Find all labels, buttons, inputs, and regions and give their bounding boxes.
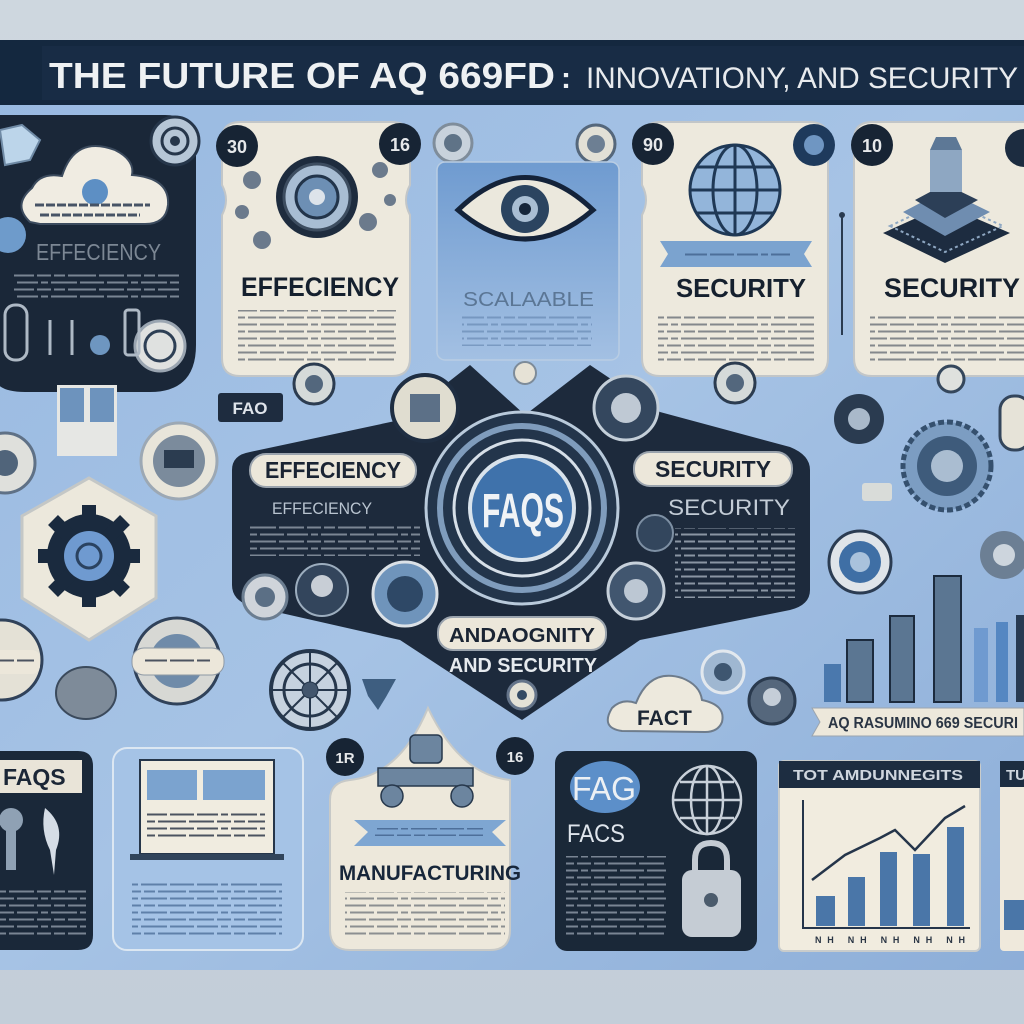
bars	[816, 827, 964, 926]
axis labels: NH NH NH NH NH	[815, 935, 965, 945]
icon: small ring 2	[577, 125, 615, 163]
panel: central FAQ hub	[232, 365, 810, 720]
text block	[870, 313, 1024, 363]
icon: edge machine	[980, 531, 1024, 579]
badge: 90	[632, 123, 674, 165]
heading: security: SECURITY	[668, 495, 790, 520]
icon: browser	[130, 760, 284, 860]
heading: SECURITY	[676, 273, 806, 303]
chart: skyline bars	[824, 576, 1024, 702]
line series	[812, 806, 965, 880]
icon: blue coin	[829, 531, 891, 593]
pill: efficiency	[250, 454, 416, 487]
badge: 16	[496, 737, 534, 775]
badge: 1R	[326, 738, 364, 776]
pill: anonymity: ANDAOGNITY	[449, 625, 596, 647]
panel: scalable	[437, 162, 619, 360]
icon: server boxes	[57, 385, 117, 456]
icon: tools	[5, 305, 139, 360]
panel: manufacturing	[330, 708, 521, 950]
heading: EFFECIENCY	[241, 272, 399, 302]
heading: FACS: FACS	[567, 820, 625, 848]
panel: efficiency card	[222, 122, 410, 376]
panel: bottom left FAQs	[0, 751, 93, 950]
pin	[514, 362, 536, 384]
icon: network globe	[903, 422, 991, 510]
icon: left bottom badge	[0, 620, 42, 700]
text blocks	[250, 522, 420, 556]
icon: pill badge	[132, 618, 224, 704]
icon: small ring	[434, 124, 472, 162]
icon: wheel	[271, 651, 349, 729]
heading: and security: AND SECURITY	[449, 655, 598, 677]
text block	[14, 272, 179, 300]
panel: edge card	[1000, 761, 1024, 951]
badge: 16: 16	[507, 749, 523, 766]
icon: machine	[378, 735, 473, 807]
badge: 30: 30	[227, 137, 247, 157]
panel: line chart	[779, 761, 980, 951]
vertical connector	[839, 212, 845, 335]
icon: edge badge	[1000, 396, 1024, 450]
chart header: TOT AMDUNNEGITS	[793, 767, 963, 784]
text block	[566, 856, 666, 938]
icons row	[243, 375, 673, 626]
panel: browser glass	[113, 748, 303, 950]
panel: FAQ dark	[555, 751, 757, 951]
banner: chart label	[812, 708, 1024, 736]
icon: small badge	[508, 681, 536, 709]
badge: 10	[851, 124, 893, 166]
heading: FAG	[570, 761, 640, 813]
icon: cloud	[21, 146, 168, 224]
icon: cloud FACT	[608, 676, 723, 732]
pill: security: SECURITY	[655, 456, 771, 482]
badge: 16: 16	[390, 135, 410, 155]
icon: padlock	[682, 843, 741, 937]
heading: MANUFACTURING	[339, 862, 521, 885]
icon: gem	[362, 679, 396, 710]
panel: security card 2	[854, 122, 1024, 376]
badge: ring	[793, 124, 835, 166]
panel: efficiency dark left	[0, 115, 196, 392]
text block	[462, 316, 592, 346]
icon: chip stack	[883, 137, 1010, 263]
heading: SECURITY	[884, 273, 1020, 303]
icon: badge	[135, 321, 185, 371]
pill: security	[634, 452, 792, 486]
icon: blue dot left	[0, 217, 26, 253]
text block	[238, 310, 396, 362]
small icons	[235, 162, 396, 249]
icon: ring small	[702, 651, 744, 693]
text block	[345, 892, 505, 938]
icon: cloud FACT: FACT	[637, 707, 692, 730]
icon: gear hexagon	[22, 478, 156, 640]
icon: lock glass top left	[0, 125, 40, 165]
icon: small box	[862, 483, 892, 501]
badge: 16	[379, 123, 421, 165]
right column icons	[834, 394, 884, 444]
icon: gear round	[749, 678, 795, 724]
badge: 10: 10	[862, 136, 882, 156]
heading: FAG: FAG	[572, 770, 636, 807]
badge: edge	[1005, 129, 1024, 167]
title banner: THE FUTURE OF AQ 669FD	[49, 55, 555, 96]
chart header	[779, 761, 980, 788]
icon: ring left edge	[0, 433, 35, 493]
icon: gear eye	[276, 156, 358, 238]
label: FAQ: FAO	[233, 399, 267, 418]
icon: eye	[458, 178, 593, 239]
text block	[658, 312, 814, 362]
badge: 30	[216, 125, 258, 167]
icon: ring	[715, 363, 755, 403]
label: FAQ	[218, 393, 283, 422]
panel: security card 1	[642, 122, 828, 376]
text block	[132, 880, 282, 936]
center label: FAQS	[482, 485, 564, 538]
icon: globe	[690, 145, 780, 235]
icon: ring	[294, 364, 334, 404]
icon: globe	[673, 766, 741, 834]
pill: efficiency: EFFECIENCY	[265, 457, 401, 483]
ribbon	[660, 241, 812, 267]
icon: ring	[938, 366, 964, 392]
badge: 1R: 1R	[335, 750, 355, 767]
ribbon	[354, 820, 506, 846]
label	[0, 760, 82, 793]
axes	[803, 800, 970, 928]
title banner	[0, 40, 1024, 105]
heading: efficiency: EFFECIENCY	[36, 239, 161, 265]
heading: SCALAABLE	[463, 289, 594, 311]
icon: spiral top	[151, 117, 199, 165]
icon: monitor badge	[141, 423, 217, 499]
icon: round mini	[56, 667, 116, 719]
badge: 90: 90	[643, 135, 663, 155]
pill: anonymity	[438, 617, 606, 650]
text block	[0, 888, 86, 938]
icon: key and pen	[0, 808, 59, 875]
ring	[426, 412, 618, 604]
label: FAQS	[3, 764, 66, 790]
title banner: INNOVATIONY, AND SECURITY	[586, 62, 1018, 95]
heading: efficiency small: EFFECIENCY	[272, 499, 372, 518]
title banner: :	[561, 62, 571, 95]
